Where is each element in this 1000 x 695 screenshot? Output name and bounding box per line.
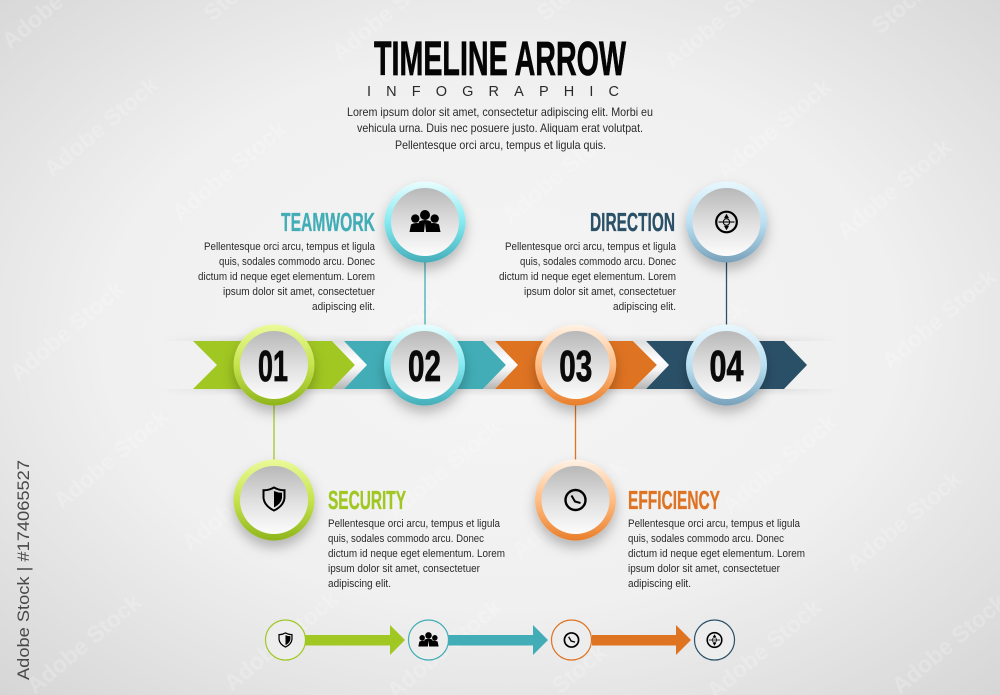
intro text (347, 106, 653, 152)
flow node: clock (552, 620, 592, 660)
panel: efficiency (535, 460, 805, 590)
watermark pattern: Adobe Stock (177, 445, 301, 556)
intro text: Pellentesque orci arcu, tempus et ligula quis. (395, 139, 606, 152)
flow arrow: green (305, 625, 405, 655)
watermark pattern: Adobe Stock (49, 403, 173, 514)
timeline arrow band (193, 341, 807, 389)
text: security: adipiscing elit. (328, 578, 391, 590)
watermark pattern: Adobe Stock (382, 413, 506, 524)
text: teamwork: adipiscing elit. (312, 301, 375, 313)
panel: security (234, 460, 505, 590)
intro text: Lorem ipsum dolor sit amet, consectetur adipiscing elit. Morbi eu (347, 106, 653, 119)
text: direction: Pellentesque orci arcu, tempus et ligula (505, 241, 676, 253)
arrow segment: orange (495, 341, 657, 389)
chevron gap (633, 341, 669, 389)
text: efficiency: quis, sodales commodo arcu. Donec (628, 533, 785, 545)
chevron gap (483, 341, 518, 389)
watermark pattern: Adobe Stock (5, 275, 129, 386)
text: efficiency: Pellentesque orci arcu, tempus et ligula (628, 518, 800, 530)
flow node: people (408, 620, 448, 660)
watermark pattern: Stock (382, 289, 446, 349)
watermark pattern: Adobe Stock (507, 453, 631, 564)
text: teamwork: ipsum dolor sit amet, consectetuer (223, 286, 375, 298)
step badge 04: 04 (710, 342, 744, 391)
step badge 02 (384, 324, 465, 406)
text: security: quis, sodales commodo arcu. Donec (328, 533, 485, 545)
heading: teamwork: TEAMWORK (281, 207, 375, 237)
band shadow (189, 338, 811, 393)
text: teamwork: Pellentesque orci arcu, tempus et ligula (204, 241, 375, 253)
flow node: shield (266, 620, 306, 660)
text: security: dictum id neque eget elementum. Lorem (328, 548, 505, 560)
chevron gap (332, 341, 367, 389)
watermark pattern: Stock (687, 294, 751, 354)
heading: direction: DIRECTION (590, 207, 675, 237)
flow node: compass (694, 620, 734, 660)
step badge 04 (686, 324, 767, 406)
icon badge: security (234, 460, 314, 540)
heading: security: SECURITY (328, 485, 406, 515)
panel: teamwork (198, 182, 466, 313)
text: direction: adipiscing elit. (613, 301, 676, 313)
connector lines (274, 258, 726, 464)
watermark pattern: Adobe Stock (877, 263, 1000, 374)
step badge 03 (535, 324, 616, 406)
flow arrow: orange (592, 625, 691, 655)
icon badge: efficiency (535, 460, 616, 540)
watermark pattern: Adobe Stock (832, 133, 956, 244)
text: efficiency: ipsum dolor sit amet, consectetuer (628, 563, 780, 575)
flow arrow: teal (448, 625, 548, 655)
arrow segment: green (193, 341, 355, 389)
watermark pattern: Adobe Stock (712, 73, 836, 184)
bottom flow diagram (266, 620, 734, 660)
watermark pattern: Adobe Stock (842, 465, 966, 576)
step badge 02: 02 (408, 342, 441, 391)
panel: direction (499, 182, 767, 313)
text: efficiency (628, 518, 805, 590)
text: direction: ipsum dolor sit amet, consectetuer (524, 286, 676, 298)
watermark pattern: Adobe Stock (497, 118, 621, 229)
watermark pattern: Adobe Stock (167, 115, 291, 226)
intro text: vehicula urna. Duis nec posuere justo. Aliquam erat volutpat. (357, 122, 643, 135)
text: security: ipsum dolor sit amet, consectetuer (328, 563, 480, 575)
text: teamwork: quis, sodales commodo arcu. Donec (219, 256, 376, 268)
watermark pattern: Adobe Stock (39, 71, 163, 182)
step badge 01 (234, 324, 314, 406)
text: efficiency: dictum id neque eget elementum. Lorem (628, 548, 805, 560)
text: efficiency: adipiscing elit. (628, 578, 691, 590)
title: TIMELINE ARROW (374, 33, 626, 86)
icon badge: direction (686, 182, 767, 262)
text: direction: quis, sodales commodo arcu. Donec (520, 256, 677, 268)
text: teamwork: dictum id neque eget elementum. Lorem (198, 271, 375, 283)
watermark pattern: Adobe Stock (717, 408, 841, 519)
subtitle: INFOGRAPHIC (367, 84, 619, 100)
watermark pattern: Adobe Stock (219, 585, 343, 695)
text: teamwork (198, 241, 376, 313)
step badge 01: 01 (258, 342, 288, 391)
stock id side label: Adobe Stock | #174065527 (14, 460, 33, 680)
heading: efficiency: EFFICIENCY (628, 485, 720, 515)
text: direction: dictum id neque eget elementum. Lorem (499, 271, 676, 283)
text: direction (499, 241, 677, 313)
icon badge: teamwork (384, 182, 466, 262)
arrow segment: teal (344, 341, 506, 389)
arrow segment: navy (646, 341, 807, 389)
step badge 03: 03 (559, 342, 592, 391)
text: security (328, 518, 505, 590)
text: security: Pellentesque orci arcu, tempus et ligula (328, 518, 500, 530)
